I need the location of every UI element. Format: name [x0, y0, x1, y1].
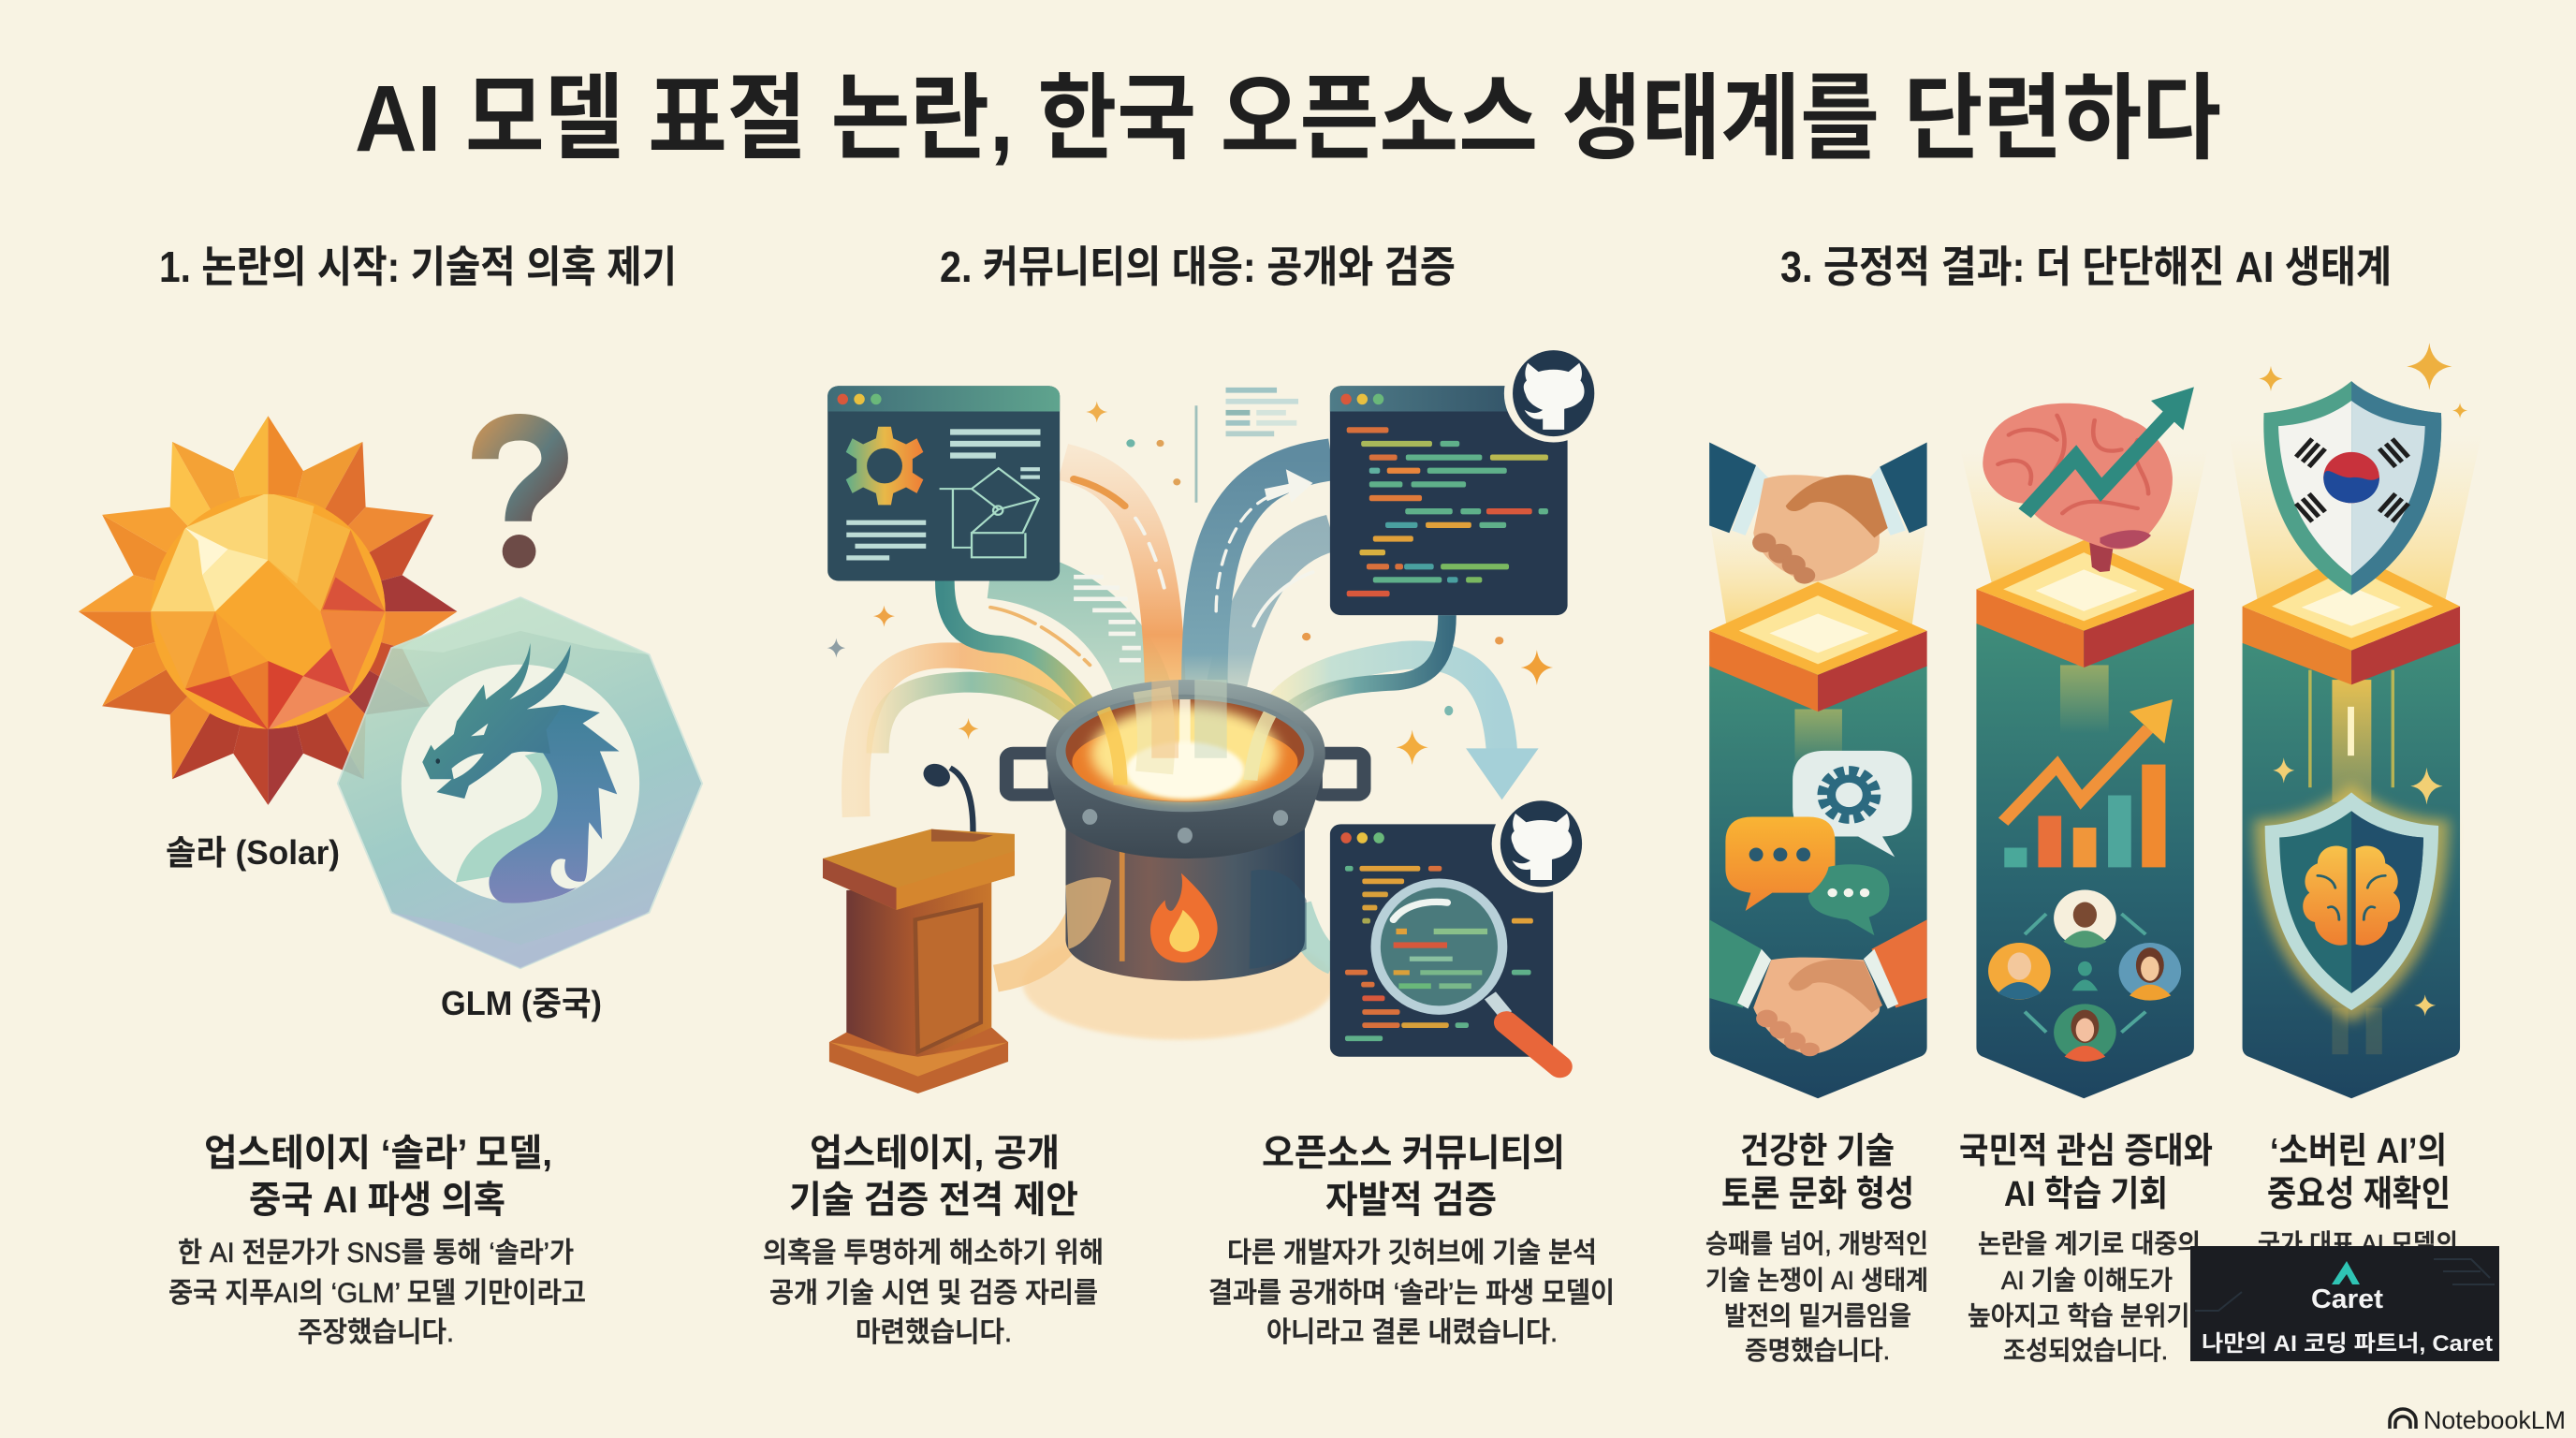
heading [789, 1133, 1078, 1221]
promo overlay: Caret [2190, 1246, 2499, 1361]
avatar top [2054, 889, 2116, 947]
icon: gear [846, 427, 923, 505]
icon: speech bubble orange [1725, 817, 1835, 911]
pot glow [1090, 707, 1279, 800]
heading: 업스테이지 ‘솔라’ 모델, [204, 1133, 552, 1174]
heading: ‘소버린 AI’의 [2270, 1132, 2447, 1171]
sparkles [2259, 343, 2467, 1016]
icon: GLM dragon emblem [338, 597, 702, 968]
heading [1721, 1132, 1914, 1214]
text block: debate culture [1705, 1132, 1928, 1365]
text block: public verification [763, 1133, 1104, 1348]
icon: solar sun [79, 416, 457, 805]
heading: 중국 AI 파생 의혹 [249, 1180, 505, 1221]
light beam [2229, 435, 2481, 607]
icon: speech bubble with gear [1793, 751, 1912, 857]
body: 증명했습니다. [1745, 1336, 1890, 1365]
panel: github code window [1330, 386, 1568, 615]
flows of information [856, 460, 1502, 978]
icon: speech bubble green [1808, 864, 1889, 935]
code lines [1347, 427, 1548, 596]
illustration: community response [823, 345, 1603, 1093]
body: 논란을 계기로 대중의 [1978, 1229, 2201, 1258]
heading [2267, 1132, 2451, 1214]
body: 기술 논쟁이 AI 생태계 [1705, 1266, 1928, 1295]
icon: NotebookLM mark [2390, 1409, 2416, 1429]
avatar left [1988, 943, 2051, 1000]
body: 다른 개발자가 깃허브에 기술 분석 [1227, 1238, 1597, 1269]
icon: Korea flag shield [2263, 381, 2441, 595]
icon: github badge bottom [1492, 795, 1590, 893]
illustration: solar vs GLM [79, 416, 702, 968]
label: GLM: GLM (중국) [441, 984, 602, 1022]
heading [204, 1133, 552, 1221]
body [168, 1238, 586, 1348]
code lines [1345, 866, 1533, 1041]
light beam [1707, 508, 1928, 626]
body: 결과를 공개하며 ‘솔라’는 파생 모델이 [1208, 1278, 1615, 1309]
body: 국가 대표 AI 모델의 [2258, 1229, 2458, 1258]
glow under pot [1023, 927, 1334, 1040]
icon: magnifying glass [1376, 883, 1560, 1066]
heading: 건강한 기술 [1740, 1132, 1895, 1171]
body: 중국 지푸AI의 ‘GLM’ 모델 기만이라고 [168, 1278, 586, 1309]
title: AI 모델 표절 논란, 한국 오픈소스 생태계를 단련하다 [355, 66, 2221, 171]
panel: analysis code window [1330, 824, 1553, 1057]
heading: 토론 문화 형성 [1721, 1175, 1914, 1214]
schematic diagram [940, 468, 1039, 557]
dragon body and tail [489, 705, 620, 903]
pot handles [1006, 754, 1364, 795]
heading: 국민적 관심 증대와 [1959, 1132, 2213, 1171]
heading: section 1: 1. 논란의 시작: 기술적 의혹 제기 [159, 242, 677, 291]
body [1705, 1229, 1928, 1365]
body: 한 AI 전문가가 SNS를 통해 ‘솔라’가 [178, 1238, 574, 1269]
people circle [1988, 889, 2181, 1062]
text block: community verification [1208, 1133, 1615, 1348]
trigrams [2296, 439, 2408, 521]
heading [1262, 1133, 1565, 1221]
text block: public interest [1959, 1132, 2213, 1365]
panel: technical demo window [827, 386, 1060, 580]
body: 조성되었습니다. [2003, 1336, 2168, 1365]
small code snippet floating [1196, 388, 1298, 503]
illustration: positive results banners [1707, 343, 2481, 1098]
body [1968, 1229, 2213, 1365]
avatar bottom [2054, 1004, 2116, 1062]
heading: 오픈소스 커뮤니티의 [1262, 1133, 1565, 1174]
icon: Caret logo [2332, 1261, 2360, 1284]
body: AI 기술 이해도가 [2001, 1266, 2173, 1295]
banner 1: healthy debate [1707, 442, 1928, 1098]
decorations: sparkles [827, 402, 1553, 765]
icon: question mark [485, 427, 555, 568]
wordmark: NotebookLM [2423, 1406, 2566, 1434]
banner 2: public interest [1960, 387, 2207, 1098]
icon: podium [823, 759, 1015, 1093]
icon: brain with arrow [1983, 387, 2194, 572]
heading: 업스테이지, 공개 [810, 1133, 1060, 1174]
body: 승패를 넘어, 개방적인 [1705, 1229, 1928, 1258]
body: 아니라고 결론 내렸습니다. [1266, 1317, 1558, 1348]
streams entering pot [1104, 680, 1270, 785]
flow details: dashes [990, 469, 1313, 665]
icon: flame [1150, 873, 1218, 962]
brain [2303, 845, 2400, 946]
heading: 중요성 재확인 [2267, 1175, 2451, 1214]
heading: section 2: 2. 커뮤니티의 대응: 공개와 검증 [940, 242, 1456, 291]
circuit decoration [2195, 1259, 2495, 1311]
logo text: Caret [2311, 1284, 2383, 1314]
body: 공개 기술 시연 및 검증 자리를 [769, 1278, 1098, 1309]
sun disc facets [151, 492, 386, 730]
heading: AI 학습 기회 [2004, 1175, 2168, 1214]
dragon tail curl [551, 858, 584, 888]
brain folds [2318, 875, 2385, 919]
body: 의혹을 투명하게 해소하기 위해 [763, 1238, 1104, 1269]
body: 발전의 밑거름임을 [1724, 1301, 1911, 1330]
person icon center [2072, 961, 2098, 990]
dragon head and horns [422, 643, 571, 799]
heading [1959, 1132, 2213, 1214]
body [1208, 1238, 1615, 1348]
body [763, 1238, 1104, 1348]
bar chart with arrow [2003, 699, 2173, 867]
avatar right [2119, 943, 2181, 1001]
arrow: down to analysis panel [1466, 748, 1539, 800]
pot rim [1046, 680, 1325, 858]
icon: melting pot [1006, 680, 1364, 981]
text block: sovereign AI [2258, 1132, 2458, 1258]
pot side ribbons [1065, 877, 1111, 949]
heading: section 3: 3. 긍정적 결과: 더 단단해진 AI 생태계 [1780, 242, 2392, 291]
icon: handshake bottom [1709, 919, 1927, 1056]
banner 3: sovereign AI [2229, 343, 2481, 1098]
heading: 자발적 검증 [1325, 1180, 1497, 1221]
glowing beam streaks [2308, 670, 2394, 1054]
icon: AI brain shield [2254, 783, 2450, 1022]
heading: 기술 검증 전격 제안 [789, 1180, 1078, 1221]
dragon belly [456, 751, 558, 883]
body: 마련했습니다. [856, 1317, 1012, 1348]
taegeuk [2323, 452, 2379, 503]
text block: Upstage Solar suspicion [168, 1133, 586, 1348]
watermark: NotebookLM [2390, 1406, 2566, 1434]
body: 주장했습니다. [298, 1317, 454, 1348]
body: 높아지고 학습 분위기가 [1968, 1301, 2213, 1330]
icon: github badge top [1504, 345, 1603, 442]
tagline: 나만의 AI 코딩 파트너, Caret [2202, 1331, 2493, 1357]
label: Solar: 솔라 (Solar) [166, 833, 340, 872]
icon: handshake top [1709, 442, 1927, 584]
light beam [1960, 449, 2207, 587]
